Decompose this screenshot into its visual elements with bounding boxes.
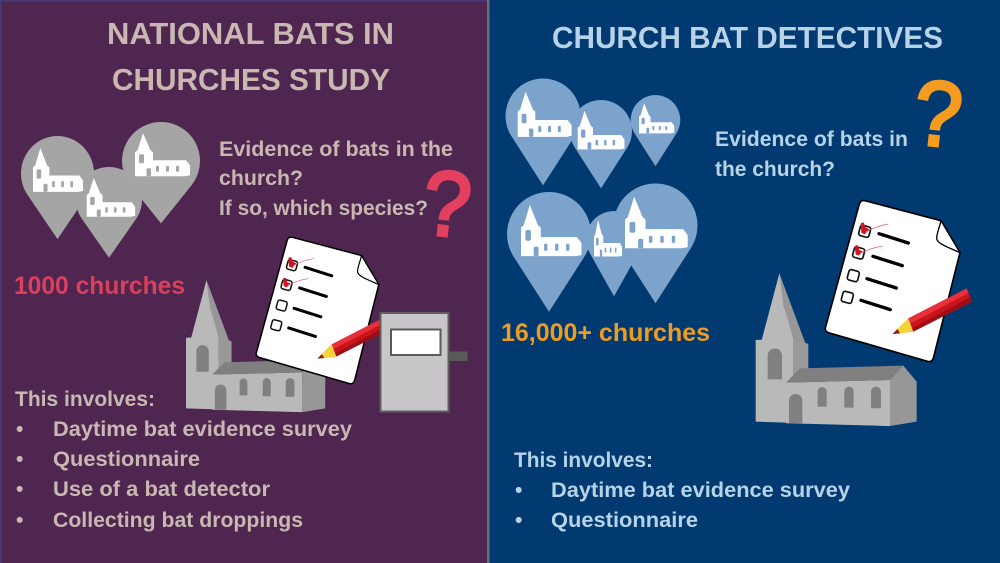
title: church bat detectives: CHURCH BAT DETECTIVES <box>552 20 943 55</box>
text: evidence question: church? <box>219 167 303 190</box>
icon: six blue church map pins <box>506 79 698 312</box>
panel: church bat detectives background <box>488 0 1000 563</box>
icon: survey sheet with pencil <box>256 237 390 384</box>
list: national study involves: This involves: <box>15 388 155 411</box>
icon: orange question mark: ? <box>909 61 967 168</box>
text: evidence question: If so, which species? <box>219 197 428 220</box>
list: national study involves <box>15 388 352 532</box>
title: national bats in churches study <box>107 16 394 97</box>
icon: bat detector <box>380 313 468 412</box>
text: evidence question right: the church? <box>715 158 835 181</box>
list: national study involves: • <box>16 509 23 532</box>
title: national bats in churches study: CHURCHES STUDY <box>112 62 390 97</box>
list: national study involves: Use of a bat detector <box>53 478 270 501</box>
icon: grey church <box>186 280 325 412</box>
icon: three grey church map pins <box>21 122 200 258</box>
text: evidence question right <box>715 128 908 181</box>
icon: red question mark: ? <box>418 151 476 258</box>
text: evidence question right: Evidence of bats in <box>715 128 908 151</box>
text: evidence question <box>219 138 453 220</box>
label: 1000 churches: 1000 churches <box>14 272 185 300</box>
list: national study involves: • <box>16 418 23 441</box>
list: national study involves: Daytime bat evidence survey <box>53 418 352 441</box>
list: church bat detectives involves: • <box>515 479 522 502</box>
title: national bats in churches study: NATIONAL BATS IN <box>107 16 394 51</box>
label: 16,000+ churches: 16,000+ churches <box>501 319 710 347</box>
icon: grey church right <box>756 273 917 426</box>
list: national study involves: • <box>16 448 23 471</box>
panel: national study background <box>0 0 488 563</box>
list: church bat detectives involves: Daytime bat evidence survey <box>551 479 850 502</box>
list: national study involves: Questionnaire <box>53 448 200 471</box>
list: church bat detectives involves <box>514 449 850 532</box>
text: evidence question: Evidence of bats in the <box>219 138 453 161</box>
list: national study involves: • <box>16 478 23 501</box>
list: church bat detectives involves: This involves: <box>514 449 653 472</box>
list: church bat detectives involves: Questionnaire <box>551 509 698 532</box>
list: national study involves: Collecting bat droppings <box>53 509 303 532</box>
icon: survey sheet with pencil right <box>825 200 972 362</box>
list: church bat detectives involves: • <box>515 509 522 532</box>
